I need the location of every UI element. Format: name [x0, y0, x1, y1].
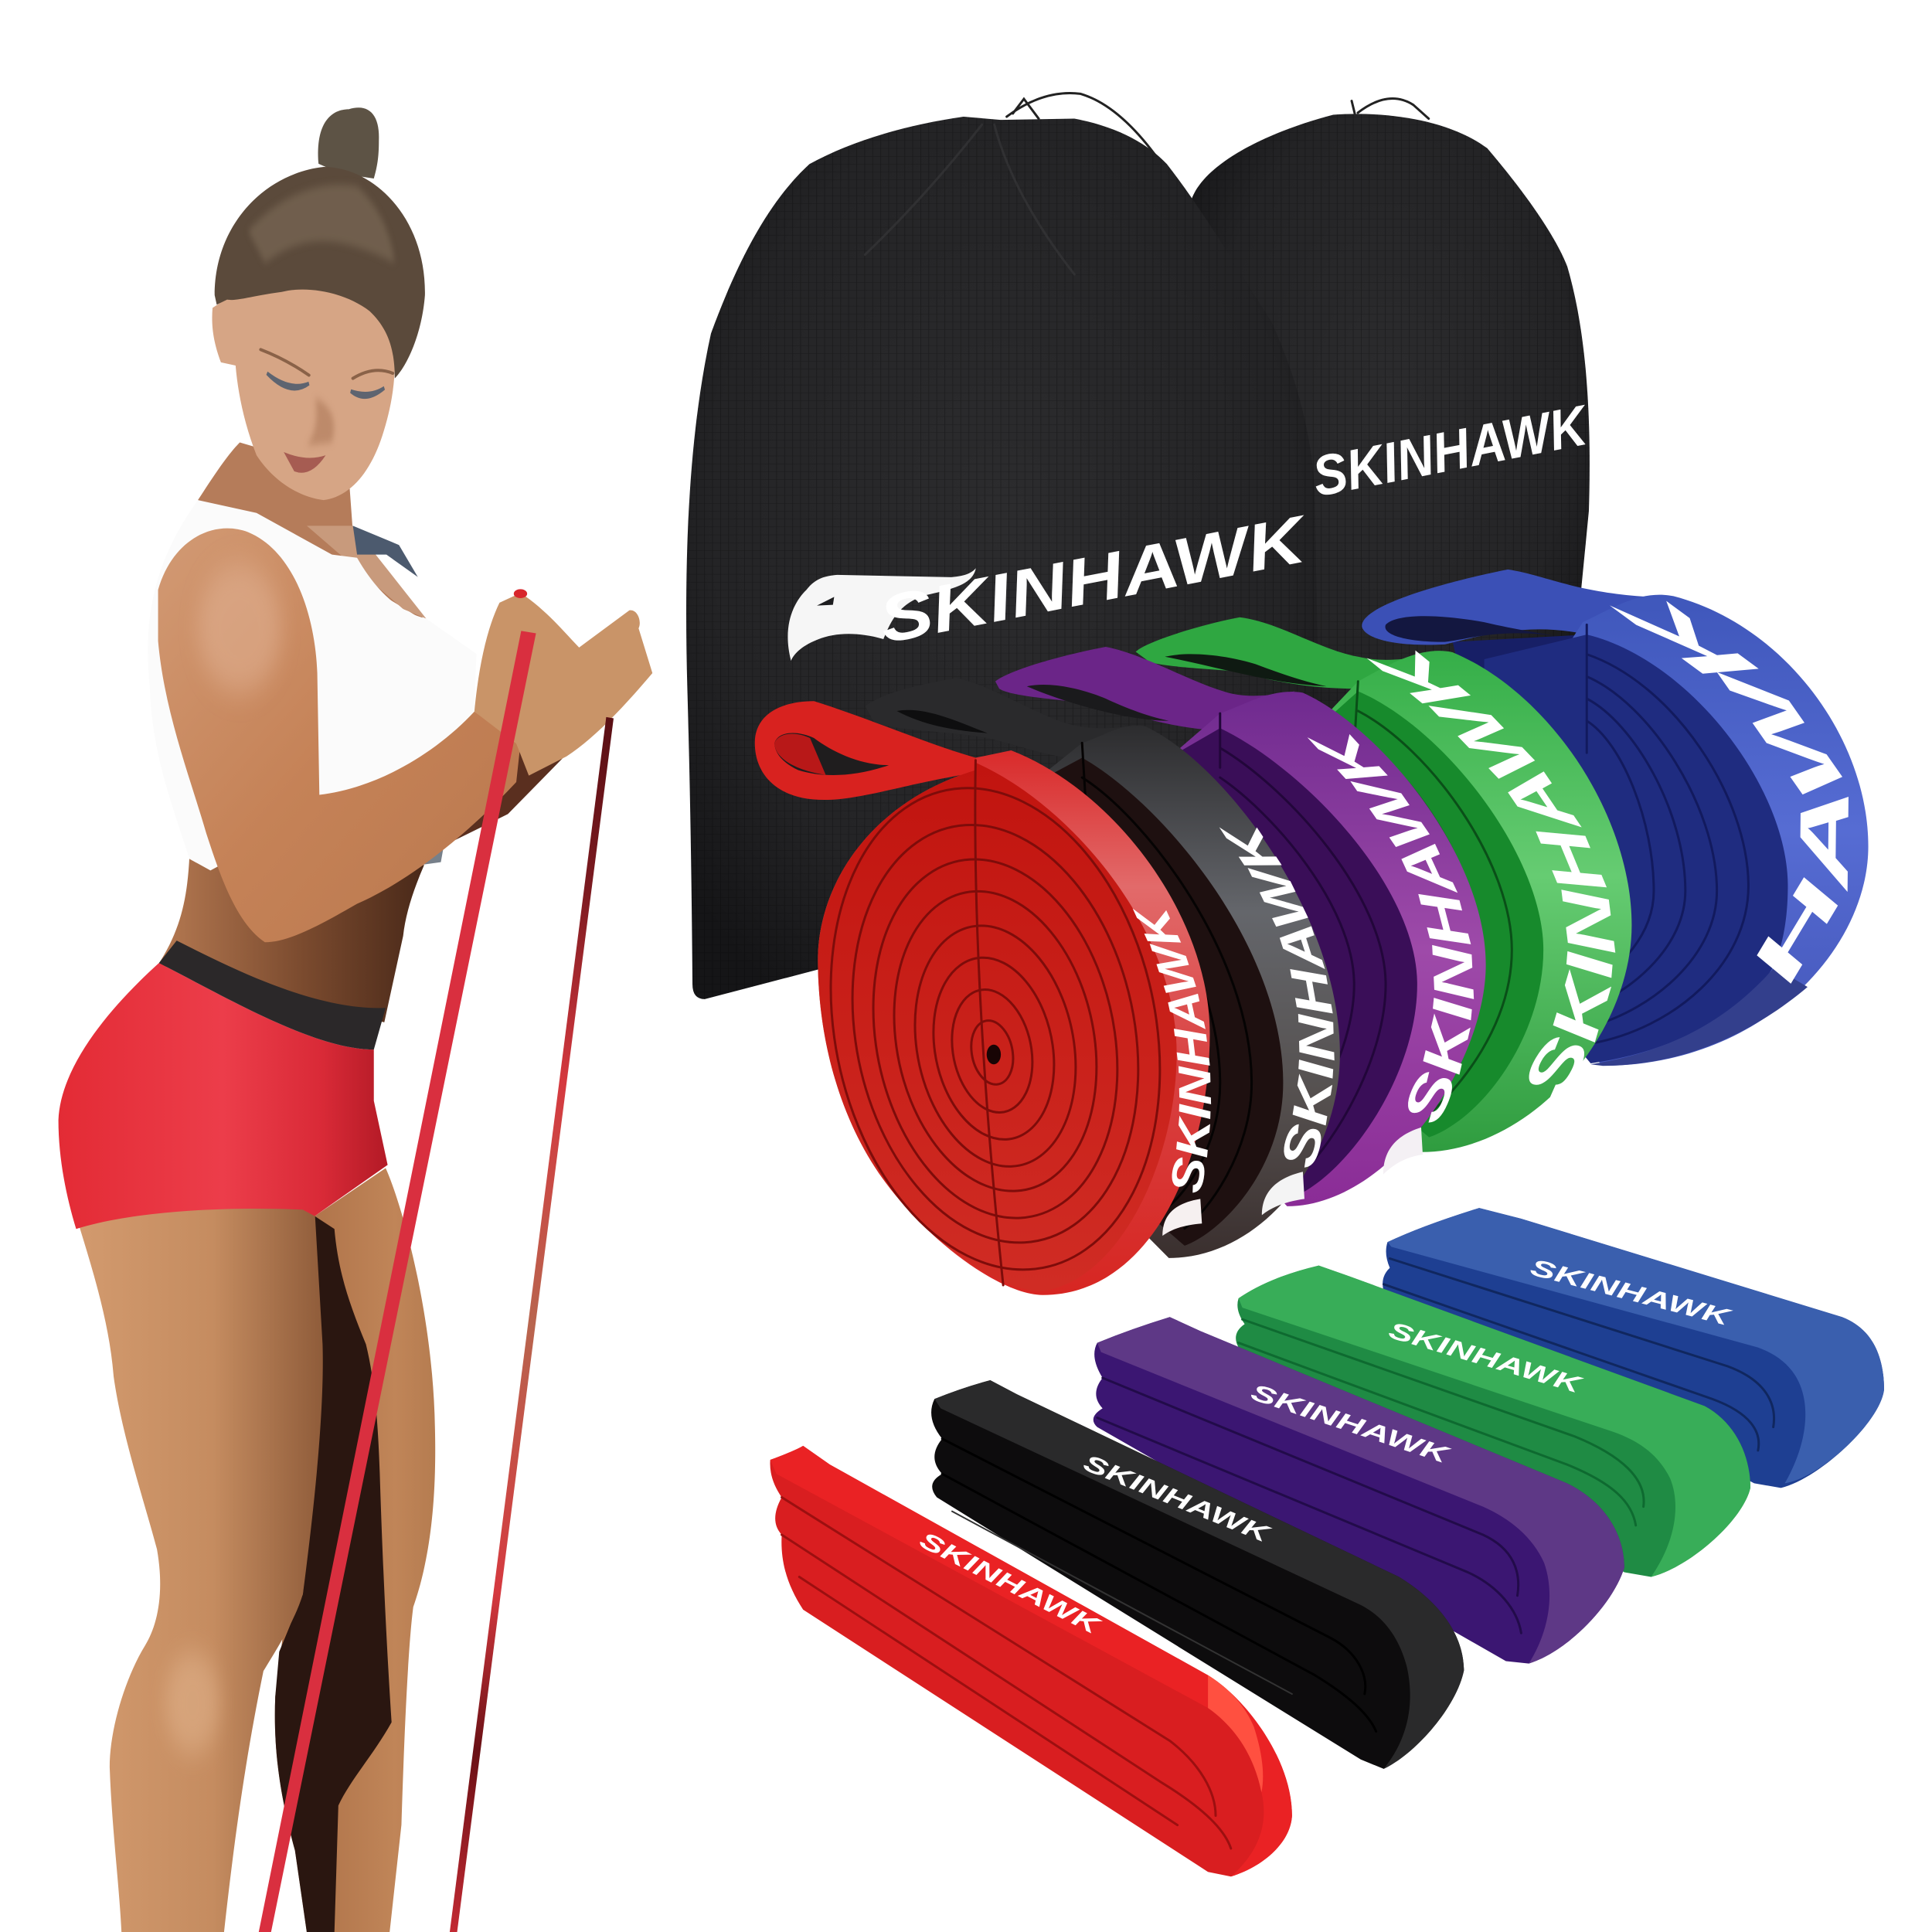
- grey bra strap: [353, 526, 418, 577]
- hands: [474, 593, 652, 776]
- blue band logo: SKINHAWK: [1528, 1254, 1735, 1332]
- black band logo: SKINHAWK: [1219, 827, 1335, 1168]
- front bag logo: SKINHAWK: [873, 502, 1316, 658]
- resistance band: far strand: [450, 717, 614, 1932]
- flat red band: [770, 1446, 1292, 1876]
- red band logo: SKINHAWK: [1133, 909, 1212, 1193]
- blue loop: [1362, 570, 1665, 645]
- black coil face: [995, 758, 1283, 1246]
- brow left: [260, 349, 309, 375]
- green coil face: [1247, 691, 1543, 1138]
- neckline chest: [307, 526, 426, 619]
- eagle eye: [817, 597, 834, 606]
- white sports top: [148, 500, 520, 870]
- flat black band: [931, 1380, 1464, 1769]
- red band edge: [818, 750, 1209, 1295]
- purple band edge: [1129, 692, 1486, 1206]
- purple band eagle mark: [1383, 1128, 1423, 1174]
- hair bun: [318, 107, 379, 179]
- rear drawstring bag: [1192, 99, 1595, 747]
- waistband: [159, 940, 386, 1049]
- flat blue band: [1383, 1208, 1884, 1488]
- green coil rings: [1354, 682, 1512, 1117]
- grey top shadow: [395, 750, 499, 869]
- black band logo: SKINHAWK: [1080, 1450, 1274, 1549]
- purple band logo: SKINHAWK: [1247, 1379, 1454, 1469]
- green loop hole: [1165, 654, 1327, 686]
- blue coil rings: [1587, 624, 1748, 1043]
- purple loop hole: [1027, 685, 1168, 721]
- torso: [158, 811, 451, 1022]
- blue coil face: [1485, 634, 1787, 1063]
- front drawstring bag: [686, 94, 1321, 999]
- eye left: [267, 373, 309, 389]
- nose shadow: [307, 398, 334, 446]
- purple band logo: SKINHAWK: [1308, 734, 1475, 1123]
- coiled green band: [1136, 617, 1632, 1152]
- mouth: [284, 452, 325, 473]
- flat green band: [1236, 1266, 1750, 1577]
- red coil face: [818, 763, 1177, 1291]
- red fingernails: [514, 589, 527, 598]
- woman exercising with a red band: [59, 107, 652, 1932]
- green band edge: [1247, 651, 1631, 1152]
- rear bag body: [1192, 99, 1590, 747]
- eye right: [351, 388, 384, 397]
- front bag body: [686, 94, 1321, 999]
- purple coil face: [1129, 728, 1417, 1196]
- coiled purple band: [995, 647, 1486, 1206]
- blue loop hole: [1385, 616, 1563, 642]
- red loop hole: [774, 733, 889, 775]
- green band body: [1236, 1266, 1750, 1577]
- back leg: [275, 1168, 435, 1932]
- blue band body: [1383, 1208, 1884, 1488]
- blue band edge: [1485, 595, 1869, 1066]
- shoulder highlight: [198, 564, 281, 692]
- black band body: [931, 1380, 1464, 1769]
- leg shadow: [275, 1216, 392, 1932]
- black loop: [866, 678, 1134, 760]
- red coil rings: [801, 760, 1190, 1285]
- brow right: [353, 370, 393, 379]
- red loop: [755, 701, 975, 800]
- black loop hole: [896, 710, 988, 733]
- flat purple band: [1094, 1317, 1624, 1664]
- neck: [198, 443, 426, 622]
- coiled red band: [754, 701, 1212, 1295]
- front leg: [78, 1197, 323, 1932]
- resistance band: near strand: [259, 631, 536, 1932]
- green loop: [1136, 617, 1445, 689]
- shorts: [59, 963, 388, 1229]
- blue coil backing: [1453, 634, 1587, 787]
- hair: [215, 167, 425, 379]
- coil centre: [987, 1045, 1001, 1064]
- green band logo: SKINHAWK: [1366, 651, 1615, 1097]
- blue coil lower edge: [1590, 968, 1808, 1066]
- blue band logo: HAWK: [1610, 601, 1849, 984]
- knee highlight: [165, 1651, 220, 1754]
- hair highlight: [248, 185, 395, 263]
- black coil rings: [1082, 743, 1252, 1229]
- coiled black band: [867, 679, 1340, 1258]
- far forearm: [449, 705, 583, 843]
- red band eagle mark: [1162, 1199, 1202, 1236]
- rear bag logo: SKINHAWK: [1308, 393, 1595, 509]
- green band logo: SKINHAWK: [1386, 1318, 1586, 1399]
- red band logo: SKINHAWK: [916, 1527, 1105, 1641]
- red loop inner shade: [774, 733, 826, 775]
- black band edge: [995, 726, 1340, 1258]
- purple band body: [1094, 1317, 1624, 1664]
- black band eagle mark: [1262, 1172, 1304, 1215]
- face: [212, 284, 395, 500]
- purple loop: [995, 647, 1295, 730]
- coiled blue band: [1362, 569, 1869, 1066]
- red band body: [770, 1446, 1292, 1876]
- purple coil rings: [1220, 713, 1386, 1172]
- arm: [158, 529, 520, 942]
- front bag eagle icon: [787, 568, 976, 661]
